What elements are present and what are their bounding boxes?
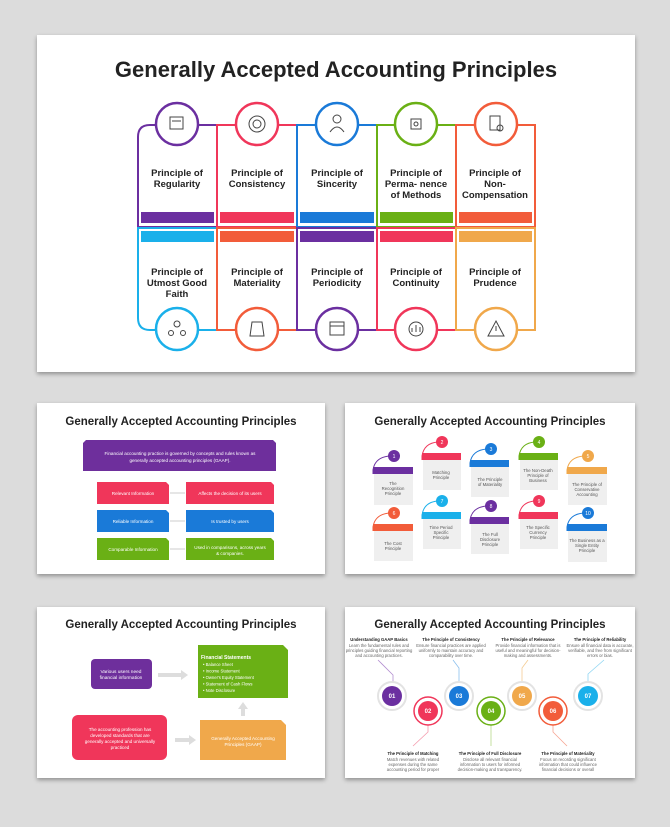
title: Generally Accepted Accounting Principles xyxy=(65,619,297,631)
step circles: 05 xyxy=(519,694,526,700)
rows: Relevant Information xyxy=(112,491,155,496)
connectors xyxy=(378,660,604,746)
card 1: Principle xyxy=(385,491,402,496)
panel: main slide: Principle of xyxy=(231,267,284,278)
panel: main slide: Consistency xyxy=(229,179,286,190)
panel: main slide: Faith xyxy=(166,289,189,300)
panel: main slide: Principle of xyxy=(390,168,443,179)
card 9: Currency xyxy=(529,530,548,535)
panel: slide 2 info xyxy=(37,403,325,574)
panel: main slide: Regularity xyxy=(154,179,201,190)
card 4: 4 xyxy=(538,440,541,446)
panel: main slide: Prudence xyxy=(473,278,517,289)
panel: slide 4 flow: • Statement of Cash Flows xyxy=(203,682,252,686)
panel: main slide: Sincerity xyxy=(317,179,358,190)
card 7: Principle xyxy=(433,535,450,540)
panel: slide 5 timeline: information that could influence xyxy=(539,762,598,767)
card 8: 8 xyxy=(490,504,493,510)
panel: slide 4 flow: generally accepted and universally xyxy=(85,739,156,744)
principle grid xyxy=(138,125,535,330)
card 4 xyxy=(519,436,558,490)
panel: slide 5 timeline: accounting period for proper xyxy=(387,767,440,772)
card 8: The Full xyxy=(482,532,498,537)
panel: slide 5 timeline xyxy=(345,607,635,778)
card 8 xyxy=(470,500,509,554)
panel: slide 4 flow: Generally Accepted Accounting xyxy=(211,736,275,741)
panel: slide 5 timeline: Ensure financial practices are applied xyxy=(416,643,486,648)
panel: slide 5 timeline: The Principle of Relevance xyxy=(501,637,555,642)
card 2: 2 xyxy=(441,440,444,446)
panel: slide 4 flow: developed standards that are xyxy=(90,733,150,738)
rows: Used in comparisons, across years xyxy=(194,545,266,550)
panel: main slide: Principle of xyxy=(469,267,522,278)
panel: slide 4 flow: financial information xyxy=(100,675,143,681)
panel: slide 5 timeline: useful and meaningful for decision- xyxy=(496,648,561,653)
panel: main slide: Principle of xyxy=(151,267,204,278)
card 1 xyxy=(373,450,413,505)
card 4: The Non-Death xyxy=(523,468,553,473)
panel: slide 5 timeline: The Principle of Reliability xyxy=(574,637,627,642)
panel: slide 5 timeline: Ensure all financial data is accurate, xyxy=(566,643,634,648)
panel: slide 4 flow: • Income Statement xyxy=(203,668,240,674)
card 4: Business xyxy=(529,478,547,483)
card 6: Principle xyxy=(385,546,402,551)
rows: Reliable Information xyxy=(113,519,154,524)
panel: slide 5 timeline: uniformly to maintain accuracy and xyxy=(419,648,484,653)
card 1: 1 xyxy=(393,454,396,460)
panel: slide 5 timeline: Disclose all relevant financial xyxy=(463,757,517,762)
step circles: 03 xyxy=(456,694,463,700)
card 5: Conservative xyxy=(574,487,600,492)
panel: main slide: Principle of xyxy=(390,267,443,278)
panel: slide 5 timeline: making and assessments. xyxy=(504,653,552,658)
title: Generally Accepted Accounting Principles xyxy=(374,416,606,428)
panel: slide 5 timeline: expenses during the same xyxy=(388,762,438,767)
step circles: 04 xyxy=(488,709,495,715)
card 1: Recognition xyxy=(382,486,405,491)
panel: main slide: Compensation xyxy=(462,190,528,201)
panel: slide 5 timeline: The Principle of Materiality xyxy=(541,751,595,756)
card 3: The Principle xyxy=(477,477,503,482)
step circles xyxy=(378,682,602,725)
step circles: 02 xyxy=(425,709,432,715)
pink box xyxy=(72,715,167,760)
purple box xyxy=(91,659,152,689)
panel: slide 5 timeline: and accounting practices. xyxy=(355,653,403,658)
panel: slide 4 flow: • Note Disclosure xyxy=(203,688,236,693)
panel: slide 5 timeline: Learn the fundamental rules and xyxy=(349,643,410,648)
title: Generally Accepted Accounting Principles xyxy=(115,57,557,82)
panel: slide 5 timeline: The Principle of Full Disclosure xyxy=(459,751,522,756)
card 2 xyxy=(422,436,461,490)
panel: main slide: Principle of xyxy=(469,168,522,179)
card 8: Disclosure xyxy=(480,537,501,542)
panel: slide 5 timeline: Focus on recording significant xyxy=(540,757,597,762)
card 7 xyxy=(422,495,461,549)
panel: slide 5 timeline: The Principle of Matching xyxy=(388,751,439,756)
card 5: 5 xyxy=(587,454,590,460)
panel: main slide: Principle of xyxy=(311,168,364,179)
panel: slide 2 info: generally accepted accounting principles (GAAP). xyxy=(129,458,231,463)
card 6 xyxy=(373,507,413,561)
panel: main slide: of Methods xyxy=(391,190,441,201)
panel: main slide xyxy=(37,35,635,372)
panel: slide 4 flow: Financial Statements xyxy=(201,655,251,661)
rows: & companies. xyxy=(216,551,244,556)
panel: main slide: Principle of xyxy=(311,267,364,278)
card 10: Single Entity xyxy=(575,543,600,548)
card 2: Principle xyxy=(433,475,450,480)
card 9: Principle xyxy=(530,535,547,540)
panel: main slide: Continuity xyxy=(393,278,440,289)
panel: slide 4 flow: • Balance Sheet xyxy=(203,662,234,667)
card 5: The Principle of xyxy=(572,482,603,487)
panel: slide 5 timeline: comparability over time. xyxy=(429,653,473,658)
panel: main slide: Principle of xyxy=(231,168,284,179)
panel: slide 5 timeline: decision-making and transparency. xyxy=(458,767,522,772)
panel: main slide: Perma- nence xyxy=(385,179,447,190)
panel: main slide: Periodicity xyxy=(313,278,362,289)
panel: slide 4 flow: • Owner's Equity Statement xyxy=(203,675,255,680)
green box xyxy=(198,645,288,698)
card 6: The Cost xyxy=(384,541,403,546)
arrows xyxy=(158,670,248,745)
card 10 xyxy=(567,507,607,562)
title: Generally Accepted Accounting Principles xyxy=(65,416,297,428)
panel: slide 4 flow xyxy=(37,607,325,778)
panel: slide 4 flow: Principles (GAAP) xyxy=(224,742,262,747)
card 9: The Specific xyxy=(526,525,551,530)
panel: slide 5 timeline: Understanding GAAP Basics xyxy=(350,637,408,642)
panel: slide 5 timeline: verifiable, and free from significant xyxy=(568,648,633,653)
panel: main slide: Non- xyxy=(484,179,506,190)
card 7: Time Period xyxy=(429,525,453,530)
icons: circles xyxy=(156,103,517,350)
card 10: Principle xyxy=(579,548,596,553)
card 1: The xyxy=(389,481,397,486)
panel: main slide: Principle of xyxy=(151,168,204,179)
panel: slide 5 timeline: financial decisions or overall xyxy=(542,767,594,772)
card 9 xyxy=(519,495,558,549)
orange box xyxy=(200,720,286,760)
card 10: 10 xyxy=(585,511,591,517)
panel: slide 5 timeline: principles guiding financial reporting xyxy=(346,648,413,653)
card 3: 3 xyxy=(490,447,493,453)
panel: main slide: Materiality xyxy=(234,278,281,289)
rows: Affects the decision of its users xyxy=(198,491,262,496)
card 7: Specific xyxy=(433,530,449,535)
card 3 xyxy=(470,443,509,497)
panel: slide 4 flow: practiced xyxy=(111,745,130,750)
card 2: Matching xyxy=(432,470,450,475)
panel: main slide: Utmost Good xyxy=(147,278,207,289)
title: Generally Accepted Accounting Principles xyxy=(374,619,606,631)
panel: slide 2 info: Financial accounting practice is governed by concepts and rules known as xyxy=(105,451,256,456)
step circles: 06 xyxy=(550,709,557,715)
panel: slide 5 timeline: The Principle of Consistency xyxy=(422,637,480,642)
panel: slide 5 timeline: errors or bias. xyxy=(587,653,613,658)
rows xyxy=(97,482,274,560)
card 7: 7 xyxy=(441,499,444,505)
rows: Comparable Information xyxy=(108,547,158,552)
card 5: Accounting xyxy=(576,492,598,497)
panel: slide 5 timeline: Provide financial information that is xyxy=(496,643,560,648)
card 3: of Materiality xyxy=(478,482,503,487)
card 5 xyxy=(567,450,607,505)
panel: slide 4 flow: The accounting profession has xyxy=(89,727,152,732)
step circles: 01 xyxy=(389,694,396,700)
card 9: 9 xyxy=(538,499,541,505)
card 8: Principle xyxy=(482,542,499,547)
panel: slide 5 timeline: information to users for informed xyxy=(460,762,521,767)
panel: slide 4 flow: Various users need xyxy=(101,669,142,675)
panel: slide 5 timeline: Match revenues with related xyxy=(387,757,440,762)
step circles: 07 xyxy=(585,694,592,700)
rows: Is trusted by users xyxy=(211,519,249,524)
purple box xyxy=(83,440,276,471)
card 10: The Business as a xyxy=(569,538,605,543)
card 4: Principle of xyxy=(527,473,549,478)
panel: slide 3 cards xyxy=(345,403,635,574)
card 6: 6 xyxy=(393,511,396,517)
